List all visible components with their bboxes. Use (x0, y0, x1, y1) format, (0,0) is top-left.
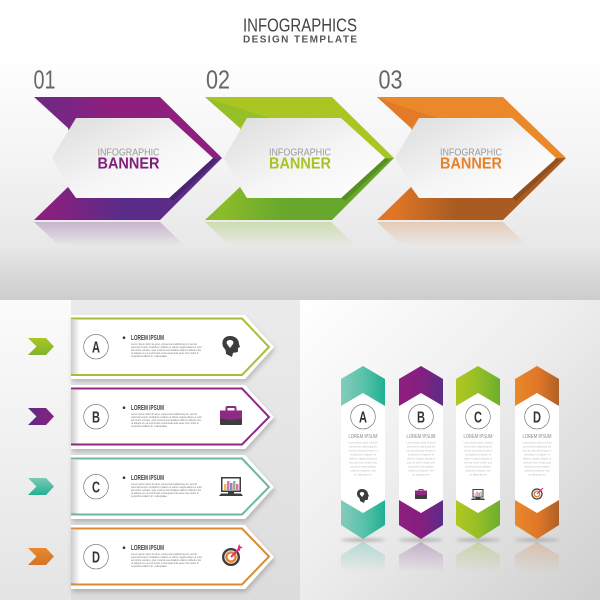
text block B: Lorem ipsum dolor sit amet, consectetur adipiscing elit, sed do (131, 413, 198, 416)
text block D: eiusmod tempor incididunt ut labore et dolore magna aliqua ut enim (131, 556, 202, 559)
text block: Lorem ipsum dolor sit amet (348, 442, 378, 444)
letter circle: B (417, 410, 425, 426)
number 02: 02 (206, 66, 230, 94)
text block D: LOREM IPSUM (131, 545, 164, 552)
text block: ullamco laboris nisi (408, 470, 434, 472)
text block B: reprehenderit in voluptate (131, 425, 168, 428)
title (243, 15, 357, 45)
banner 3: orange (377, 97, 566, 246)
text block: Lorem ipsum dolor sit amet (522, 442, 552, 444)
text block: ut aliquip ex (469, 474, 488, 476)
text block (348, 434, 378, 476)
letter circle (409, 404, 433, 429)
number 03: 03 (378, 66, 402, 94)
text block: enim ad minim veniam quis (349, 462, 378, 464)
small arrow: orange (28, 548, 54, 565)
icon: computer (471, 489, 485, 500)
card B (71, 385, 274, 449)
icon: target (532, 488, 543, 499)
text block: Lorem ipsum dolor sit amet (464, 442, 493, 444)
text block: ullamco laboris nisi (466, 470, 491, 472)
panel: lower right background (300, 300, 600, 600)
text block: enim ad minim veniam quis (464, 462, 493, 464)
text block: sed do eiusmod tempor in (464, 450, 493, 452)
letter circle: D (533, 410, 541, 426)
vertical banner C (456, 366, 500, 572)
text block: nostrud exercitation (350, 466, 377, 468)
text block B: ut aliquip ex ea commodo consequat duis aute irure dolor in (131, 422, 200, 425)
text block A: LOREM IPSUM (131, 335, 164, 342)
text block: nostrud exercitation (408, 466, 435, 468)
text block A: reprehenderit in voluptate (131, 355, 168, 358)
text block D: ut aliquip ex ea commodo consequat duis aute irure dolor in (131, 562, 200, 565)
text block B: eiusmod tempor incididunt ut labore et dolore magna aliqua ut enim (131, 416, 202, 419)
letter circle (466, 404, 490, 429)
text block A: ut aliquip ex ea commodo consequat duis aute irure dolor in (131, 352, 200, 355)
text block: ullamco laboris nisi (350, 470, 376, 472)
letter circle (351, 404, 375, 429)
banner 2: green: INFOGRAPHIC (269, 148, 331, 159)
text block: consectetur adipiscing elit (523, 446, 551, 448)
small arrow: teal (28, 478, 54, 495)
banner 1: purple (34, 97, 222, 246)
banner 2: green: BANNER (269, 155, 331, 172)
small arrow: green (28, 338, 54, 355)
icon: briefcase (220, 406, 242, 425)
icon: target with dart (223, 544, 243, 565)
text block C: Lorem ipsum dolor sit amet, consectetur adipiscing elit, sed do (131, 483, 198, 486)
number 01: 01 (34, 66, 56, 94)
text block: sed do eiusmod tempor in (522, 450, 552, 452)
text block D (123, 545, 202, 568)
text block: incididunt ut labore et (350, 454, 376, 456)
text block: sed do eiusmod tempor in (406, 450, 436, 452)
icon: computer with chart (219, 477, 243, 496)
text block: ullamco laboris nisi (524, 470, 550, 472)
text block B: LOREM IPSUM (131, 405, 164, 412)
text block C: eiusmod tempor incididunt ut labore et dolore magna aliqua ut enim (131, 486, 202, 489)
icon: head with lightbulb (222, 336, 240, 357)
text block: LOREM IPSUM (464, 434, 493, 440)
letter circle: C (474, 410, 482, 426)
panel: lower left background (0, 300, 300, 600)
letter circle D (84, 544, 108, 569)
text block C: reprehenderit in voluptate (131, 495, 168, 498)
text block: incididunt ut labore et (408, 454, 434, 456)
letter circle (525, 404, 549, 429)
letter circle D: D (92, 550, 100, 566)
panel: lower left arrow column (0, 300, 71, 600)
small arrow: purple (28, 408, 54, 425)
text block: LOREM IPSUM (348, 434, 378, 440)
text block: enim ad minim veniam quis (523, 462, 552, 464)
text block A (123, 335, 202, 358)
banner 3: orange: INFOGRAPHIC (440, 148, 502, 159)
text block: consectetur adipiscing elit (407, 446, 435, 448)
text block B: ad minim veniam, quis nostrud exercitation ullamco laboris nisi (131, 419, 201, 422)
text block C: ad minim veniam, quis nostrud exercitation ullamco laboris nisi (131, 489, 201, 492)
letter circle B: B (92, 410, 100, 426)
letter circle A (84, 334, 108, 359)
letter circle B (84, 404, 108, 429)
text block: LOREM IPSUM (522, 434, 552, 440)
text block: dolore magna aliqua ut (349, 458, 377, 460)
text block C: LOREM IPSUM (131, 475, 164, 482)
text block: ut aliquip ex (412, 474, 431, 476)
banner 2: green (205, 97, 394, 246)
text block A: ad minim veniam, quis nostrud exercitation ullamco laboris nisi (131, 349, 201, 352)
text block: consectetur adipiscing elit (464, 446, 492, 448)
text block (406, 434, 436, 476)
text block: dolore magna aliqua ut (407, 458, 435, 460)
text block D: Lorem ipsum dolor sit amet, consectetur adipiscing elit, sed do (131, 553, 198, 556)
vertical banner A (341, 366, 385, 572)
text block (522, 434, 552, 476)
text block: ut aliquip ex (528, 474, 547, 476)
title: DESIGN TEMPLATE (243, 34, 357, 45)
letter circle C (84, 474, 108, 499)
text block: LOREM IPSUM (406, 434, 436, 440)
card A (71, 315, 274, 379)
text block C (123, 475, 202, 498)
icon: head (357, 489, 369, 503)
title: INFOGRAPHICS (243, 15, 357, 36)
text block: ut aliquip ex (354, 474, 373, 476)
text block A: eiusmod tempor incididunt ut labore et dolore magna aliqua ut enim (131, 346, 202, 349)
text block: incididunt ut labore et (465, 454, 491, 456)
banner 3: orange: BANNER (440, 155, 502, 172)
text block: dolore magna aliqua ut (464, 458, 492, 460)
text block: dolore magna aliqua ut (523, 458, 551, 460)
letter circle C: C (92, 480, 100, 496)
text block: Lorem ipsum dolor sit amet (406, 442, 436, 444)
text block C: ut aliquip ex ea commodo consequat duis aute irure dolor in (131, 492, 200, 495)
text block: nostrud exercitation (524, 466, 551, 468)
vertical banner B (399, 366, 443, 572)
text block B (123, 405, 202, 428)
letter circle: A (359, 410, 367, 426)
letter circle A: A (92, 340, 100, 356)
card D (71, 525, 274, 589)
icon: briefcase (415, 489, 427, 499)
text block D: ad minim veniam, quis nostrud exercitation ullamco laboris nisi (131, 559, 201, 562)
banner 1: purple: BANNER (98, 155, 160, 172)
banner 1: purple: INFOGRAPHIC (98, 148, 160, 159)
text block: nostrud exercitation (465, 466, 492, 468)
card C (71, 455, 274, 519)
text block: incididunt ut labore et (524, 454, 550, 456)
panel: top background (0, 0, 600, 300)
text block D: reprehenderit in voluptate (131, 565, 168, 568)
text block: sed do eiusmod tempor in (348, 450, 378, 452)
text block: consectetur adipiscing elit (349, 446, 377, 448)
text block A: Lorem ipsum dolor sit amet, consectetur adipiscing elit, sed do (131, 343, 198, 346)
vertical banner D (515, 366, 559, 572)
text block (464, 434, 493, 476)
text block: enim ad minim veniam quis (407, 462, 436, 464)
